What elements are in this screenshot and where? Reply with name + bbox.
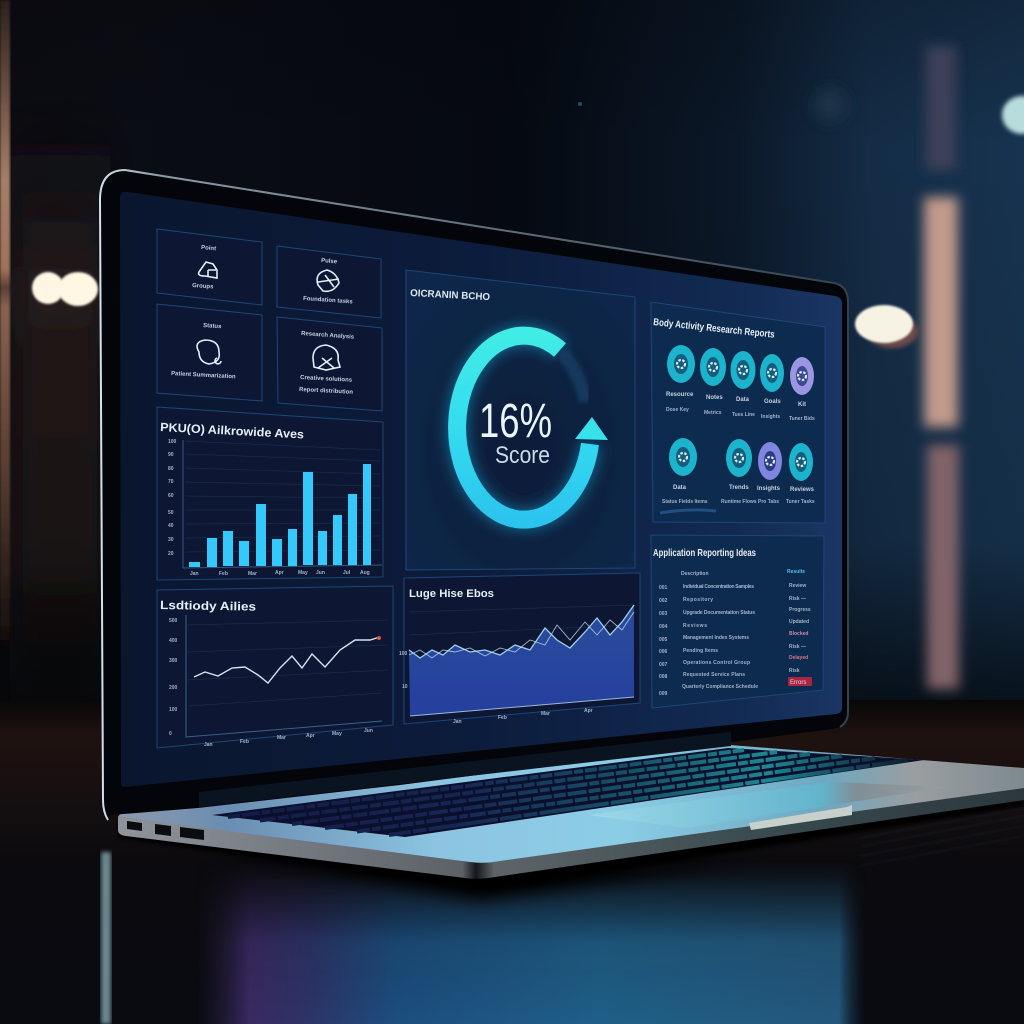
heading: Luge Hise Ebos [409,588,494,600]
table rows: Individual Concentration Samples [683,584,754,590]
laptop base [118,745,1024,879]
panel: bar chart: 60 [168,493,174,499]
panel: bar chart: Mar [248,571,257,577]
card 1 [157,229,262,305]
trackpad [588,782,947,828]
panel: line chart: Mar [277,735,286,741]
heading: PKU(O) Ailkrowide Aves [160,420,305,442]
card 2: Foundation tasks [303,296,353,306]
panel: feature icons [651,302,825,523]
table rows: Blocked [789,631,808,637]
panel: area chart: 100 [399,651,408,657]
bars [189,464,371,567]
progress ring [457,336,590,520]
icon labels: Notes [706,395,723,401]
table rows: Management Index Systems [683,635,749,641]
icon labels: Metrics [704,410,722,416]
panel: line chart: Apr [306,733,315,739]
panel: line chart: 100 [169,707,178,713]
table rows: Risk — [789,596,806,602]
keyboard [212,748,924,837]
table rows: 006 [659,649,668,655]
value: 16% [479,395,552,448]
icon labels: Data [673,485,687,491]
table rows: Operations Control Group [683,660,750,666]
table rows: Upgrade Documentation Status [683,610,755,616]
panel: bar chart: 30 [168,537,174,543]
bokeh lights [32,96,1024,348]
panel: line chart: Jan [204,742,213,748]
card 2: Pulse [321,258,338,265]
table rows: Description [681,571,709,577]
dashboard [157,229,825,748]
icon labels: Tues Line [732,412,755,418]
background: blurred room [0,0,1024,720]
panel: area chart: Jan [453,719,462,725]
icon labels [660,392,815,513]
panel: area chart: Mar [541,711,550,717]
table surface [0,700,1024,1024]
table rows: 002 [659,598,668,604]
icon: brain cloud [317,270,339,291]
panel: line chart [157,586,393,748]
panel: bar chart: 80 [168,466,174,472]
icon labels: Goals [764,399,781,405]
panel: bar chart [157,407,383,580]
panel: line chart: May [332,731,342,737]
table rows: Reviews [683,623,707,629]
card 4: Creative solutions [300,375,353,384]
red status badge: Errors [790,680,806,686]
table rows: 001 [659,585,668,591]
card 3: Status [203,323,222,330]
table rows: Quarterly Compliance Schedule [682,684,758,690]
data line [194,637,380,683]
icon labels: Data [736,397,750,403]
table rows: Review [789,583,806,589]
panel: area chart: Apr [584,708,593,714]
arrow [575,417,608,440]
card 1: Point [201,245,216,252]
panel: bar chart: 50 [168,510,174,516]
table rows: 007 [659,662,668,668]
panel: line chart: 0 [169,731,172,737]
panel: score ring: Score [495,442,550,469]
panel: bar chart: Jul [343,570,351,576]
card 1: Groups [192,283,214,291]
panel: line chart: Jun [364,728,373,734]
icon labels: Insights [761,414,780,420]
icon: people cloud [313,345,340,370]
track [562,352,586,402]
panel: bar chart: 100 [168,439,177,445]
panel: line chart: 300 [169,658,178,664]
table rows: Repository [683,597,713,603]
panel: bar chart: Jan [190,571,199,577]
panel: bar chart: 20 [168,551,174,557]
panel: area chart: 10 [402,684,408,690]
panel: table [651,535,824,708]
heading: Lsdtiody Ailies [160,598,257,614]
icon: cloud [199,262,217,278]
icon labels: Resource [666,392,694,398]
panel: line chart: Feb [240,739,249,745]
panel: area chart: Feb [498,715,507,721]
red status badge [788,677,812,686]
ring glow [457,336,590,520]
table rows [659,569,811,697]
card 3 [157,304,262,401]
table rows: Delayed [789,655,808,661]
hinge [199,732,731,807]
card 4: Report distribution [299,387,353,396]
icon: blob [197,340,221,364]
table rows: Progress [789,607,811,613]
panel: bar chart: May [298,570,308,576]
table rows: Pending Items [683,648,718,654]
card 4 [277,317,382,411]
heading: OICRANIN BCHO [410,288,491,303]
panel: bar chart: 90 [168,452,174,458]
panel: line chart: 500 [169,618,178,624]
icon labels: Dose Key [666,407,689,413]
table rows: Risk — [789,644,806,650]
panel: bar chart: Aug [360,570,370,576]
panel: bar chart: Apr [275,570,284,576]
ports [127,821,204,840]
panel: line chart: 400 [169,638,178,644]
table rows: 005 [659,637,668,643]
panel: score ring [406,270,635,570]
card 4: Research Analysis [301,331,355,341]
area [409,605,634,716]
icon labels: Trends [729,485,749,491]
front notch [749,805,852,830]
heading: Body Activity Research Reports [653,317,776,341]
panel: bar chart: Feb [219,571,228,577]
heading: Application Reporting Ideas [653,548,756,559]
table rows: Requested Service Plans [683,672,745,678]
icon labels: Kit [798,402,806,408]
table rows: 004 [659,624,668,630]
icon labels: Tuner Tasks [786,499,815,505]
panel: area chart [399,573,640,725]
panel: line chart: 200 [169,685,178,691]
icon badges [667,345,814,481]
table rows: Results [787,569,805,575]
icon labels: Status Fields Items [662,499,708,505]
table rows: Risk [789,668,800,674]
icon labels: Insights [757,486,781,492]
icon labels: Reviews [790,487,815,493]
card 2 [277,246,381,318]
icon labels: Tuner Bids [789,416,815,422]
icon labels: Runtime Flows [721,499,757,505]
panel: bar chart: 40 [168,523,174,529]
table rows: 008 [659,674,668,680]
icon labels: Pro Tabs [758,499,779,505]
panel: bar chart: Jun [316,570,325,576]
table rows: 003 [659,611,668,617]
panel: bar chart: 70 [168,479,174,485]
table rows: Updated [789,619,809,625]
table rows: 009 [659,691,668,697]
card 3: Patient Summarization [171,371,236,380]
screen [120,192,842,787]
laptop lid [100,170,848,820]
